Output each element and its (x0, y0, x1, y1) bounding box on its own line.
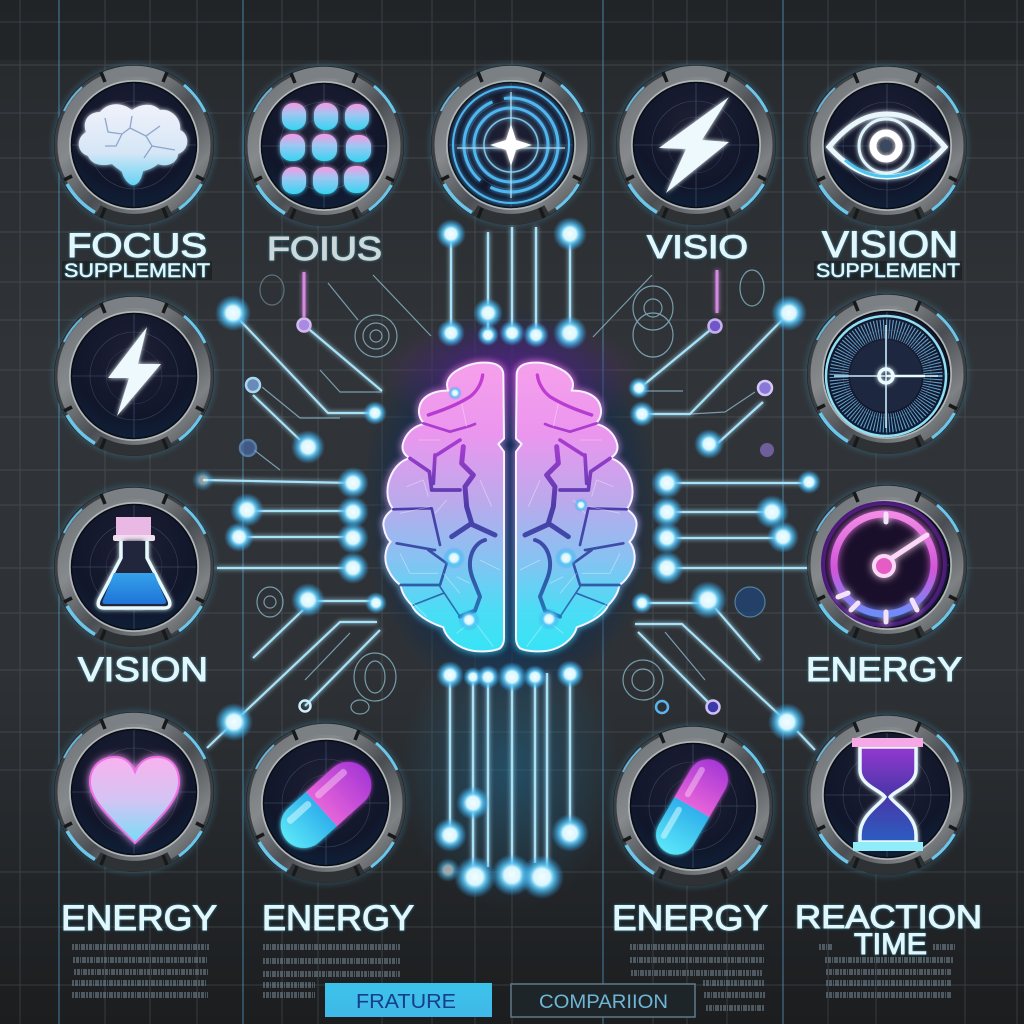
supplement backing (814, 261, 962, 280)
label: vision: VISION (822, 224, 958, 265)
target ring (429, 63, 593, 227)
icon: capsule (271, 752, 381, 858)
focus ring (52, 63, 216, 227)
pink connector bars (304, 270, 717, 317)
panel: heart (52, 710, 217, 938)
icon: capsule (649, 752, 735, 862)
eye ring (805, 64, 969, 228)
button: comparison (511, 984, 695, 1017)
panel: target (429, 63, 593, 227)
capsule ring (611, 724, 775, 888)
label: foius: FOIUS (267, 230, 382, 267)
panel: capsule right (611, 724, 775, 938)
panel: hourglass (795, 713, 982, 961)
label: energy: ENERGY (262, 899, 414, 938)
label: focus: FOCUS (67, 227, 207, 265)
glowing nodes (192, 217, 821, 899)
icon: heart (90, 757, 179, 843)
icon: eye (829, 114, 945, 177)
label: visio: VISIO (647, 229, 748, 265)
connectors: top verticals (451, 227, 570, 340)
dial ring (805, 292, 969, 456)
supplement backing (62, 261, 212, 280)
label: vision: VISION (78, 651, 208, 689)
panel: capsule left (244, 721, 414, 938)
central brain (383, 363, 637, 651)
panel: vision eye (805, 64, 969, 282)
panel: focus supplement (52, 63, 216, 282)
label: energy: ENERGY (806, 651, 962, 689)
panel: dial (805, 292, 969, 456)
panel: bolt top (614, 63, 778, 265)
connectors: left side (203, 275, 431, 748)
capsule ring (244, 721, 408, 885)
icon: brain (79, 104, 187, 185)
description text: column three (630, 947, 765, 1008)
label: energy: ENERGY (61, 899, 217, 938)
button: feature: FRATURE (356, 991, 456, 1013)
label: supplement: SUPPLEMENT (64, 261, 210, 282)
icon: radial dial (826, 316, 946, 436)
label: reaction: REACTION (795, 899, 982, 935)
description text: column four (819, 947, 955, 995)
brain sparkles (443, 386, 588, 631)
outlined purple and ring nodes (240, 318, 774, 714)
icon: nine pills (280, 103, 371, 194)
description text: column two (263, 947, 400, 995)
bolt ring (52, 294, 216, 458)
icon: radial target (453, 87, 569, 203)
button: comparison: COMPARIION (539, 992, 668, 1013)
icon: flask (98, 517, 170, 608)
icon: lightning bolt (108, 327, 161, 416)
connectors: bottom verticals (450, 673, 570, 877)
hourglass ring (805, 713, 969, 877)
bolt ring (614, 63, 778, 227)
label: time: TIME (854, 928, 927, 961)
gauge ring (805, 483, 969, 647)
panel: bolt left (52, 294, 216, 458)
flask ring (52, 485, 216, 649)
panel: flask (52, 485, 216, 689)
connectors: right side (593, 270, 815, 750)
right hemisphere (516, 363, 637, 651)
left hemisphere (383, 363, 504, 651)
icon: gauge (823, 503, 945, 625)
label: supplement: SUPPLEMENT (816, 261, 960, 282)
panel: pills grid (242, 64, 406, 267)
description text: column one (72, 947, 209, 995)
button: feature (325, 983, 492, 1017)
pills ring (242, 64, 406, 228)
label: energy: ENERGY (612, 899, 768, 938)
icon: hourglass (852, 738, 923, 851)
heart ring (52, 710, 216, 874)
panel: gauge (805, 483, 969, 689)
icon: lightning bolt (659, 97, 729, 193)
